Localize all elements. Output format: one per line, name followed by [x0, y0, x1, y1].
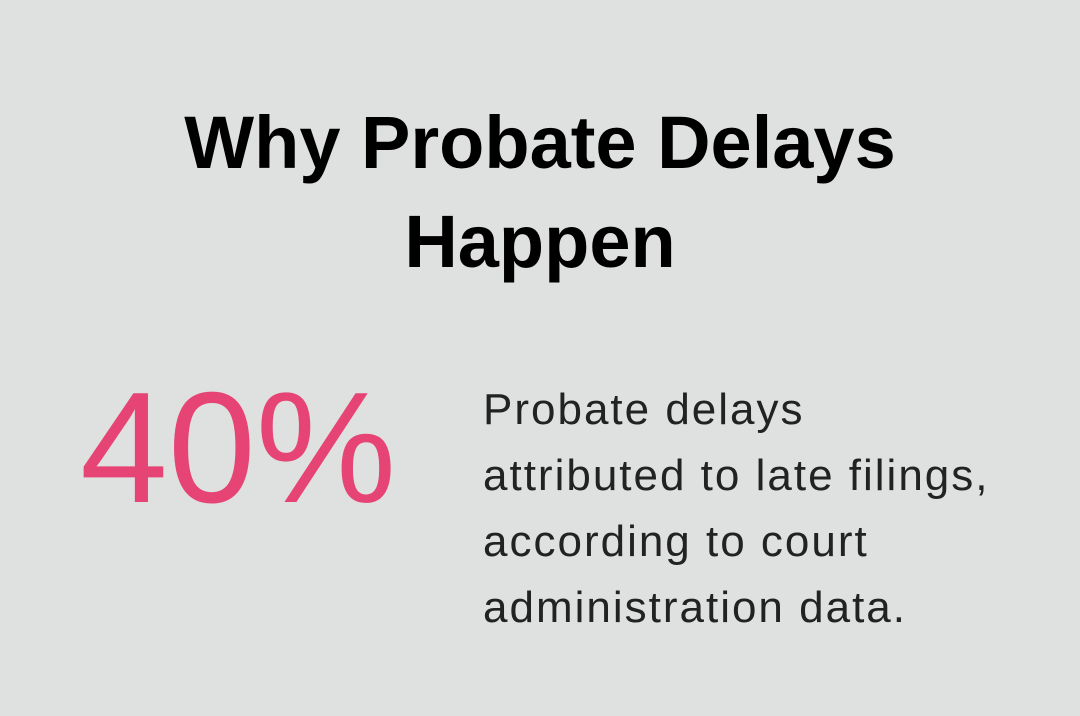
title: [184, 101, 896, 283]
description text: according to court: [483, 517, 869, 566]
description text: administration data.: [483, 583, 907, 632]
description text: [483, 385, 989, 632]
description text: Probate delays: [483, 385, 805, 434]
description text: attributed to late filings,: [483, 451, 989, 500]
stat number: 40%: [80, 360, 396, 536]
title: Happen: [404, 200, 676, 283]
title: Why Probate Delays: [184, 101, 896, 184]
